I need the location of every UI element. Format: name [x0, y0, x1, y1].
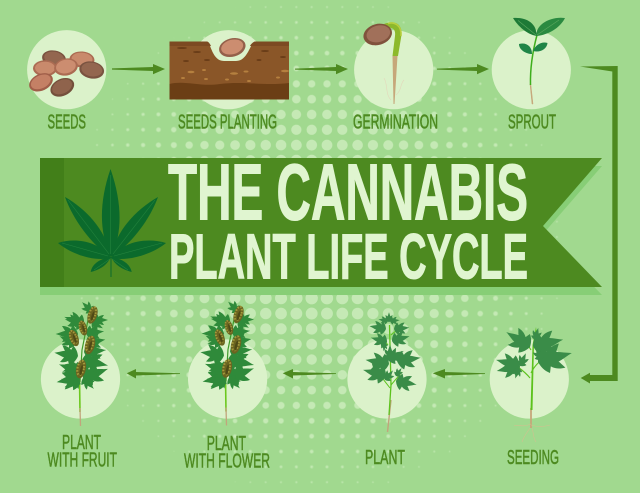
circle: germination	[354, 30, 433, 109]
banner ribbon	[40, 158, 602, 287]
label: seeds: SEEDS	[48, 112, 86, 134]
label: plant: PLANT	[365, 447, 405, 469]
circle: fruit	[41, 339, 120, 419]
circle: planting	[189, 30, 268, 109]
banner shadow	[40, 166, 602, 295]
label: seeds planting: SEEDS PLANTING	[178, 112, 277, 134]
icon: germinating seed	[361, 21, 404, 104]
seed in soil	[217, 35, 248, 60]
arrow: sprout to seeding	[580, 66, 618, 384]
arrow: flower to fruit	[127, 369, 180, 378]
label: plant with flower: WITH FLOWER	[184, 451, 270, 473]
circle: seeding	[490, 339, 569, 419]
step: germination	[353, 21, 438, 133]
icon: cannabis leaf	[58, 169, 166, 277]
step: sprout	[492, 18, 571, 134]
label: germination: GERMINATION	[353, 112, 438, 134]
icon: seeds	[26, 49, 105, 100]
step: plant	[347, 312, 427, 469]
circle: plant	[347, 339, 427, 419]
circle: sprout	[492, 30, 571, 109]
banner left strip	[40, 158, 64, 287]
arrow: plant to flower	[283, 369, 336, 378]
step: seeds planting	[170, 30, 289, 134]
arrow: seeding to plant	[433, 369, 485, 378]
circle: seeds	[27, 30, 106, 109]
label: plant with fruit: WITH FRUIT	[48, 450, 117, 472]
arrow: seeds to planting	[112, 64, 165, 74]
label: plant with fruit	[48, 432, 117, 472]
icon: soil cross-section	[170, 35, 289, 100]
step: plant with flower	[184, 298, 270, 473]
label: seeding: SEEDING	[507, 447, 559, 469]
step: seeds	[26, 30, 106, 134]
icon: flowering plant	[199, 298, 258, 426]
step: seeding	[490, 323, 575, 469]
circle: flower	[188, 339, 267, 419]
icon: seedling	[494, 323, 575, 442]
step: plant with fruit	[41, 298, 120, 472]
arrow: germination to sprout	[437, 64, 489, 74]
label: plant with fruit: PLANT	[62, 432, 101, 454]
icon: fruiting plant	[53, 298, 112, 426]
arrow: planting to germination	[295, 64, 348, 74]
title	[168, 147, 528, 292]
label: plant with flower	[184, 433, 270, 473]
icon: plant	[361, 312, 422, 432]
label: plant with flower: PLANT	[207, 433, 246, 455]
label: sprout: SPROUT	[508, 112, 556, 134]
banner	[40, 158, 602, 295]
icon: sprout	[513, 18, 565, 104]
